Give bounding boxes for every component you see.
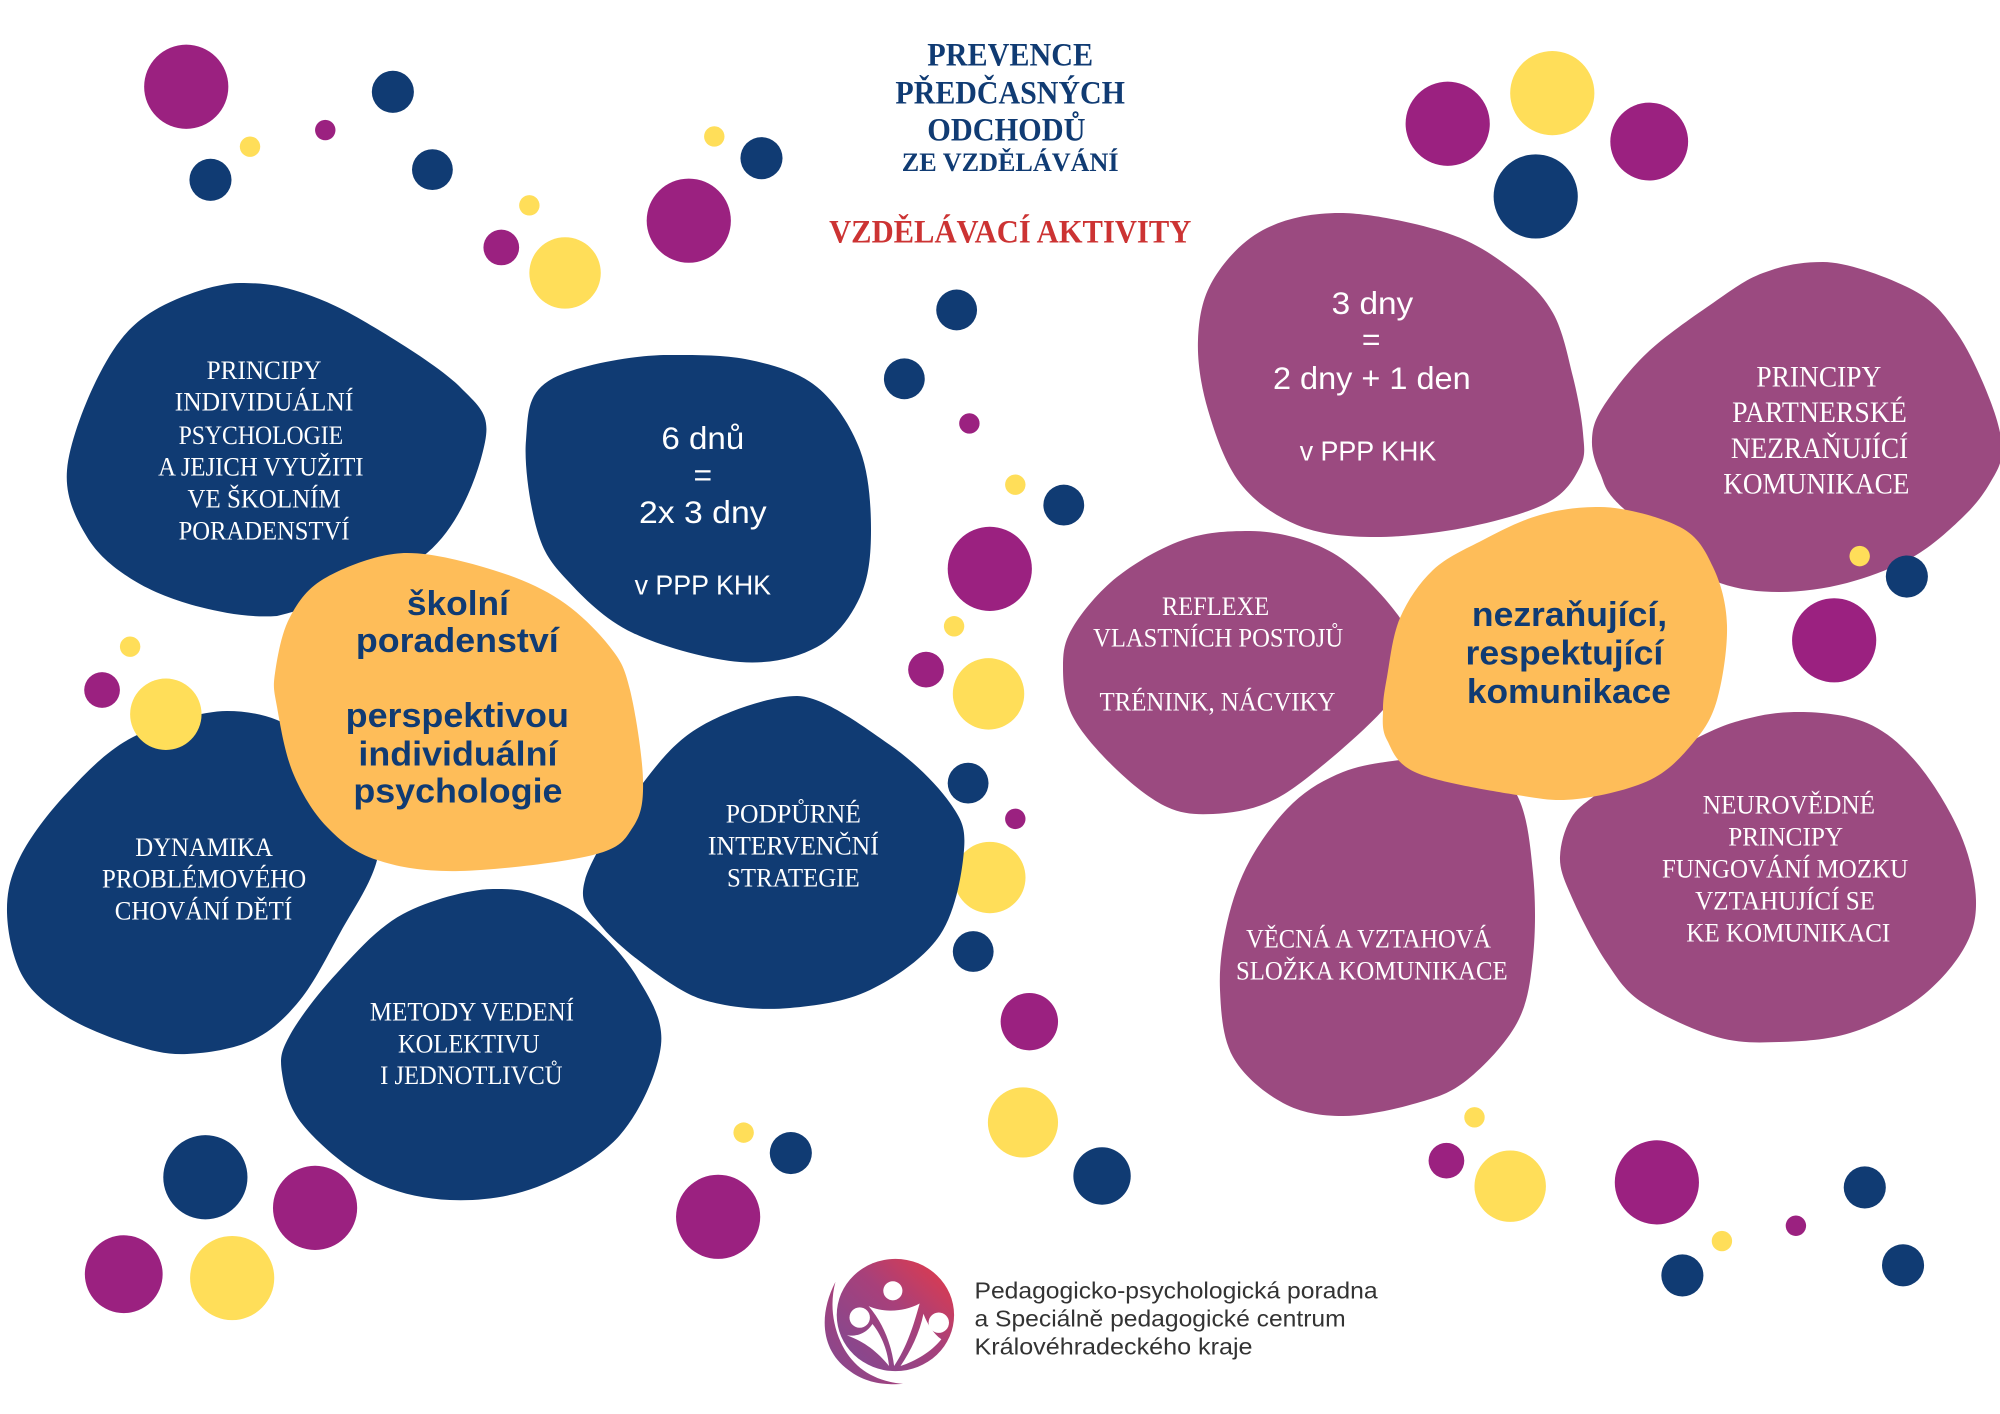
petal: principles of individual psychology: INDIVIDUÁLNÍ — [175, 387, 353, 417]
flower centre: non-violent communication: komunikace — [1467, 673, 1671, 711]
petal: content and relational component: VĚCNÁ A VZTAHOVÁ — [1246, 924, 1492, 954]
left flower: school counselling — [7, 283, 964, 1200]
petal: principles of partner communication: KOMUNIKACE — [1723, 469, 1909, 501]
petal: duration 3 days: 2 dny + 1 den — [1273, 360, 1471, 396]
petal: duration 3 days: 3 dny — [1332, 285, 1413, 321]
petal: supportive intervention strategies: PODPŮRNÉ — [726, 798, 861, 829]
petal: duration 3 days: v PPP KHK — [1300, 435, 1436, 466]
organisation name: Pedagogicko-psychologická poradna — [974, 1277, 1378, 1303]
flower centre: non-violent communication: nezraňující, — [1472, 596, 1667, 634]
flower centre: school counselling: školní — [407, 585, 510, 623]
petal: content and relational component — [1220, 753, 1535, 1116]
title: ODCHODŮ — [927, 109, 1086, 148]
petal: dynamics of problem behaviour — [7, 711, 378, 1054]
petal: duration 3 days — [1198, 213, 1584, 537]
petal: reflection and training — [1063, 531, 1411, 814]
petal: principles of partner communication — [1592, 262, 2000, 592]
petal: principles of individual psychology — [67, 283, 486, 616]
petal: reflection and training: VLASTNÍCH POSTOJŮ — [1093, 622, 1343, 653]
petal: principles of individual psychology: PSYCHOLOGIE — [179, 420, 343, 450]
petal: reflection and training: REFLEXE — [1162, 591, 1269, 621]
flower centre: non-violent communication: respektující — [1466, 635, 1665, 673]
petal: supportive intervention strategies — [583, 696, 964, 1009]
title: PŘEDČASNÝCH — [895, 73, 1125, 111]
petal: dynamics of problem behaviour: PROBLÉMOVÉHO — [102, 864, 306, 894]
petal: methods of leading groups — [281, 889, 661, 1200]
flower centre: school counselling: individuální — [358, 735, 559, 773]
petal: principles of individual psychology: A JEJICH VYUŽITI — [158, 452, 364, 482]
petal: neuroscience principles: FUNGOVÁNÍ MOZKU — [1662, 854, 1908, 884]
petal: reflection and training: TRÉNINK, NÁCVIKY — [1099, 686, 1335, 716]
petal: neuroscience principles — [1560, 712, 1976, 1042]
flower centre: school counselling: psychologie — [353, 772, 563, 810]
title: ZE VZDĚLÁVÁNÍ — [902, 147, 1119, 177]
petal: duration 3 days: = — [1362, 322, 1380, 358]
organisation name: a Speciálně pedagogické centrum — [974, 1306, 1346, 1332]
petal: duration 6 days — [526, 355, 871, 662]
petal: dynamics of problem behaviour: DYNAMIKA — [135, 832, 274, 862]
organisation name — [974, 1277, 1378, 1360]
decorative dots: top left — [144, 45, 783, 309]
title: PREVENCE — [927, 37, 1093, 74]
title — [895, 37, 1125, 177]
flower centre: school counselling: perspektivou — [346, 697, 569, 735]
petal: methods of leading groups: I JEDNOTLIVCŮ — [380, 1059, 563, 1090]
organisation name: Královéhradeckého kraje — [974, 1334, 1253, 1360]
subtitle: educational activities: VZDĚLÁVACÍ AKTIVITY — [829, 212, 1191, 250]
petal: neuroscience principles: KE KOMUNIKACI — [1686, 917, 1890, 947]
petal: methods of leading groups: METODY VEDENÍ — [370, 996, 574, 1026]
petal: principles of individual psychology: VE ŠKOLNÍM — [188, 484, 341, 514]
petal: principles of individual psychology: PRINCIPY — [207, 355, 321, 385]
petal: duration 6 days: 2x 3 dny — [639, 494, 767, 530]
decorative dots: left edge — [84, 636, 202, 750]
petal: duration 6 days: v PPP KHK — [635, 569, 771, 600]
petal: dynamics of problem behaviour: CHOVÁNÍ DĚTÍ — [115, 896, 292, 926]
decorative dots: bottom — [85, 1107, 1924, 1320]
petal: methods of leading groups: KOLEKTIVU — [398, 1028, 540, 1058]
petal: neuroscience principles: VZTAHUJÍCÍ SE — [1695, 885, 1875, 915]
decorative dots: top right — [1406, 51, 1688, 239]
petal: duration 6 days: 6 dnů — [661, 420, 744, 456]
decorative dots: centre column — [884, 290, 1131, 1205]
logo — [825, 1259, 1378, 1384]
petal: content and relational component: SLOŽKA KOMUNIKACE — [1236, 956, 1508, 986]
petal: principles of partner communication: NEZRAŇUJÍCÍ — [1731, 432, 1908, 465]
petal: principles of partner communication: PARTNERSKÉ — [1732, 396, 1907, 429]
petal: neuroscience principles: NEUROVĚDNÉ — [1703, 790, 1875, 820]
petal: supportive intervention strategies: INTERVENČNÍ — [708, 831, 879, 861]
flower centre: school counselling — [274, 553, 643, 871]
flower centre: non-violent communication — [1383, 507, 1727, 800]
petal: supportive intervention strategies: STRATEGIE — [727, 862, 860, 892]
petal: duration 6 days: = — [694, 457, 712, 493]
petal: principles of partner communication: PRINCIPY — [1756, 361, 1881, 393]
petal: principles of individual psychology: PORADENSTVÍ — [179, 516, 350, 546]
decorative dots: right edge — [1792, 546, 1928, 682]
petal: neuroscience principles: PRINCIPY — [1728, 822, 1843, 852]
flower centre: school counselling: poradenství — [356, 622, 560, 660]
logo emblem — [825, 1259, 954, 1384]
right flower: non-violent communication — [1063, 213, 2000, 1116]
